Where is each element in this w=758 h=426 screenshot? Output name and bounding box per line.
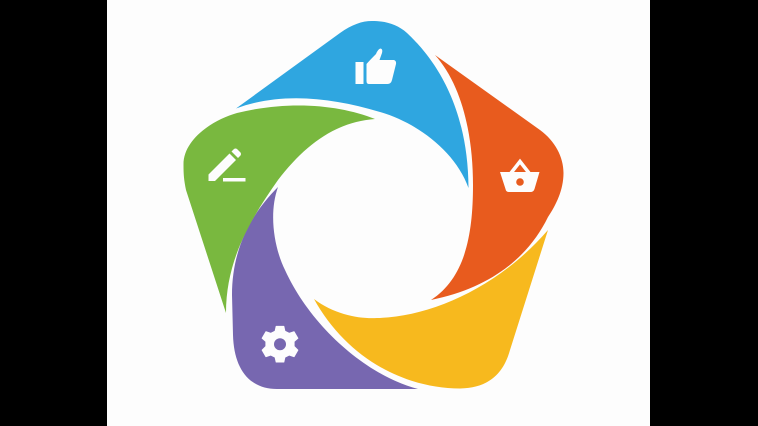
- icon: gear: [262, 326, 298, 362]
- segment: yellow: [314, 230, 548, 388]
- icon: thumbs up: [356, 48, 396, 84]
- segment: blue with thumbs-up: [236, 21, 468, 188]
- segment: green with pencil: [183, 105, 375, 313]
- segment: purple with gear: [232, 187, 418, 389]
- icon: basket: [500, 162, 540, 192]
- icon: pencil: [208, 148, 246, 182]
- segment: orange with basket: [431, 55, 564, 300]
